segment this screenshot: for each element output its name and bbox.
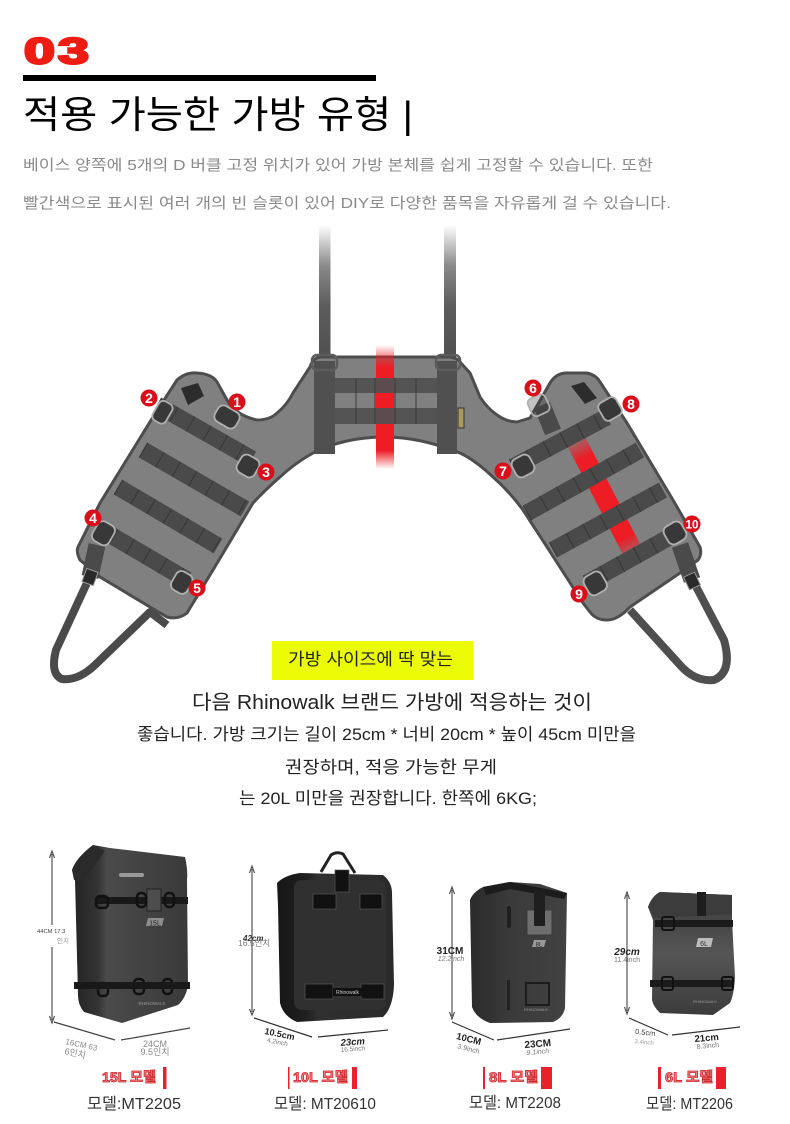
badge 9 xyxy=(570,586,588,602)
height label xyxy=(437,946,464,963)
top fold xyxy=(483,882,567,899)
badge 6: 6 xyxy=(529,380,537,396)
brand patch: Rhinowalk xyxy=(336,990,360,996)
center stitching xyxy=(356,378,416,424)
section number: 03 xyxy=(24,30,92,72)
highlight box xyxy=(272,641,473,680)
height label: 인치 xyxy=(57,936,69,945)
roll top xyxy=(72,845,105,882)
depth label xyxy=(64,1037,99,1060)
highlight box: 가방 사이즈에 딱 맞는 xyxy=(288,650,453,669)
panel: 8L bag xyxy=(437,882,570,1057)
brand mark: RHINOWALK xyxy=(524,1007,548,1012)
6L tag: 6L 모델 xyxy=(665,1069,713,1085)
badge 8 xyxy=(622,396,640,412)
model numbers: 모델:MT2205 xyxy=(87,1095,181,1113)
badge 10: 10 xyxy=(686,520,698,532)
width label: 21cm xyxy=(694,1032,719,1045)
base body xyxy=(77,357,701,620)
model numbers: 모델: MT2208 xyxy=(469,1094,561,1112)
height arrow xyxy=(450,887,454,1019)
brand mark: RHINOWALK xyxy=(138,1001,166,1006)
strap rings xyxy=(96,893,174,996)
depth label: 0.5cm xyxy=(635,1027,656,1038)
center D rings xyxy=(312,355,460,370)
right red slot marker xyxy=(573,435,637,560)
height label: 11.4inch xyxy=(614,957,640,964)
bag body xyxy=(277,873,394,1022)
model numbers: 모델: MT20610 xyxy=(274,1095,376,1113)
right straps xyxy=(513,405,692,583)
compatibility text: 권장하며, 적응 가능한 무게 xyxy=(285,758,497,777)
model tags xyxy=(102,1069,713,1085)
depth and width arrows xyxy=(629,1018,740,1035)
depth label: 3.4inch xyxy=(634,1039,654,1047)
lower buckles xyxy=(82,568,700,590)
bag body xyxy=(470,882,567,1023)
compatibility text: 좋습니다. 가방 크기는 길이 25cm * 너비 20cm * 높이 45cm 미만을 xyxy=(137,725,636,744)
depth and width arrows xyxy=(254,1018,388,1037)
height label xyxy=(34,925,72,947)
intro text: 베이스 양쪽에 5개의 D 버클 고정 위치가 있어 가방 본체를 쉽게 고정할 수 있습니다. 또한 xyxy=(23,157,653,174)
width label: 9.5인치 xyxy=(140,1046,170,1057)
model numbers xyxy=(87,1094,733,1113)
shoulder straps xyxy=(319,225,456,360)
width label xyxy=(694,1032,720,1051)
8L tag: 8L 모델 xyxy=(489,1069,538,1085)
height label: 29cm xyxy=(613,947,640,958)
depth and width arrows xyxy=(452,1022,570,1040)
width label: 8.3inch xyxy=(696,1042,720,1051)
panel: 15L bag xyxy=(34,845,190,1060)
right strap stitching xyxy=(513,417,677,583)
intro text xyxy=(23,157,671,212)
size tag xyxy=(146,918,164,928)
depth label: 16CM 63 xyxy=(65,1037,99,1053)
width label: 16.5inch xyxy=(340,1045,366,1054)
brand patch xyxy=(333,988,362,996)
lower strap xyxy=(650,980,734,987)
height label: 42cm xyxy=(242,934,263,943)
bag body xyxy=(648,892,735,1015)
badge 1 xyxy=(228,394,246,410)
badge 9: 9 xyxy=(575,586,583,602)
size tag xyxy=(696,938,713,948)
center buckle xyxy=(697,892,706,916)
intro text: 빨간색으로 표시된 여러 개의 빈 슬롯이 있어 DIY로 다양한 품목을 자유롭게 걸 수 있습니다. xyxy=(23,195,671,212)
title: 적용 가능한 가방 유형 | xyxy=(23,95,413,137)
badge 5: 5 xyxy=(193,580,201,596)
depth label xyxy=(634,1027,656,1047)
height label: 31CM xyxy=(437,946,463,957)
compatibility text: 다음 Rhinowalk 브랜드 가방에 적응하는 것이 xyxy=(192,691,592,714)
badge 7: 7 xyxy=(499,463,507,479)
size tag: 6L xyxy=(700,941,708,948)
velcro patch xyxy=(527,910,552,935)
depth label: 3.9inch xyxy=(457,1043,480,1056)
width label xyxy=(524,1038,552,1057)
15L tag: 15L 모델 xyxy=(102,1069,156,1085)
height label: 16.5인치 xyxy=(238,938,270,948)
badge 1: 1 xyxy=(233,394,241,410)
badge 7 xyxy=(494,462,512,480)
height label xyxy=(613,947,640,964)
badge 4 xyxy=(84,510,102,526)
width label xyxy=(339,1036,366,1054)
center straps xyxy=(314,361,457,454)
badge 8: 8 xyxy=(627,396,635,412)
side zipper xyxy=(507,906,511,928)
left strap stitching xyxy=(97,405,252,580)
right loop strap xyxy=(630,575,727,680)
front panel xyxy=(294,880,386,1010)
width label: 24CM xyxy=(143,1039,167,1049)
handle xyxy=(321,853,355,873)
panel: 10L bag xyxy=(238,853,394,1054)
badge 10 xyxy=(684,516,700,532)
badge 6 xyxy=(524,380,542,396)
heading rule xyxy=(23,75,376,81)
buckle left xyxy=(181,383,204,405)
left loop strap xyxy=(54,572,167,679)
panel: molle base diagram xyxy=(54,225,727,680)
brand tag xyxy=(458,408,464,428)
badge 3 xyxy=(258,464,274,480)
height label: 12.2inch xyxy=(438,956,464,963)
badge 4: 4 xyxy=(89,510,97,526)
badge 5 xyxy=(188,580,206,596)
height label: 44CM 17.3 xyxy=(37,929,65,935)
depth label: 10.5cm xyxy=(264,1026,296,1042)
center red slot marker xyxy=(376,345,394,469)
height arrow xyxy=(50,851,54,1023)
compatibility text xyxy=(137,691,636,808)
velcro patch xyxy=(147,889,161,911)
upper strap xyxy=(96,897,188,904)
upper strap xyxy=(655,920,733,927)
compatibility text: 는 20L 미만을 권장합니다. 한쪽에 6KG; xyxy=(239,789,537,808)
panel: 6L bag xyxy=(613,892,740,1051)
size tag: 8L xyxy=(536,942,543,948)
width label: 23CM xyxy=(524,1038,552,1051)
roll top xyxy=(648,892,732,918)
10L tag: 10L 모델 xyxy=(293,1069,348,1085)
height arrow xyxy=(250,866,254,1015)
depth and width arrows xyxy=(54,1022,190,1040)
top straps xyxy=(305,870,384,999)
size tag xyxy=(532,940,546,948)
width label xyxy=(140,1039,170,1057)
badge 2 xyxy=(140,390,158,406)
height arrow xyxy=(624,892,630,1014)
pocket zipper xyxy=(119,873,144,877)
depth label: 6인치 xyxy=(64,1045,87,1060)
red tag bars xyxy=(163,1067,726,1089)
depth label: 10CM xyxy=(455,1031,482,1048)
badge 2: 2 xyxy=(145,390,153,406)
badge 3: 3 xyxy=(262,464,270,480)
buckle right xyxy=(571,382,597,404)
width label: 9.1inch xyxy=(526,1048,550,1057)
left straps xyxy=(90,405,252,580)
D rings xyxy=(90,393,689,598)
size tag: 15L xyxy=(149,920,161,928)
width label: 23cm xyxy=(339,1036,366,1049)
depth label xyxy=(455,1031,482,1056)
brand mark: RHINOWALK xyxy=(693,999,717,1004)
depth label: 4.2inch xyxy=(266,1037,289,1048)
lower handle xyxy=(526,983,549,1005)
lower strap xyxy=(74,982,190,989)
model numbers: 모델: MT2206 xyxy=(646,1095,733,1113)
bag body xyxy=(72,845,188,1023)
numbered badges xyxy=(84,380,700,602)
